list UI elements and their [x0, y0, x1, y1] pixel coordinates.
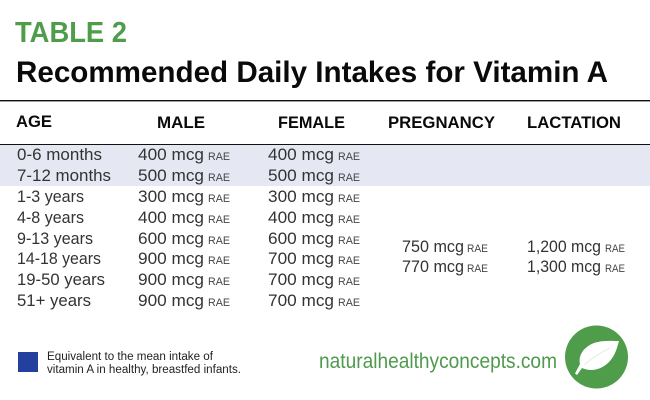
heading: title: Recommended Daily Intakes for Vitamin A: [16, 56, 608, 89]
column: lactation: [527, 238, 625, 276]
column: lactation: 1,300 mcg: [527, 258, 601, 276]
column: pregnancy: RAE: [467, 263, 488, 275]
table header row: FEMALE: [278, 113, 345, 132]
column: female: RAE: [338, 172, 360, 184]
legend note: Equivalent to the mean intake of: [47, 351, 214, 363]
column: male: 400 mcg: [138, 209, 204, 227]
column: age: [17, 146, 111, 310]
column: male: 400 mcg: [138, 146, 204, 164]
column: female: 400 mcg: [268, 146, 334, 164]
column: male: RAE: [208, 214, 230, 226]
column: pregnancy: 750 mcg: [402, 238, 464, 256]
column: age: 14-18 years: [17, 250, 101, 268]
column: pregnancy: [402, 238, 488, 276]
column: female: 600 mcg: [268, 230, 334, 248]
icon: leaf logo: [565, 326, 628, 388]
column: female: RAE: [338, 151, 360, 163]
column: male: 900 mcg: [138, 292, 204, 310]
column: female: RAE: [338, 255, 360, 267]
column: female: RAE: [338, 297, 360, 309]
highlighted infant band: [0, 145, 650, 186]
column: female: 700 mcg: [268, 250, 334, 268]
column: pregnancy: 770 mcg: [402, 258, 464, 276]
column: female: RAE: [338, 193, 360, 205]
column: female: 400 mcg: [268, 209, 334, 227]
table header row: PREGNANCY: [388, 113, 496, 132]
table header row: MALE: [157, 113, 205, 132]
column: male: RAE: [208, 235, 230, 247]
column: female: 700 mcg: [268, 292, 334, 310]
column: lactation: RAE: [605, 263, 625, 275]
column: age: 9-13 years: [17, 230, 93, 248]
column: male: RAE: [208, 255, 230, 267]
column: age: 19-50 years: [17, 271, 105, 289]
column: age: 51+ years: [17, 292, 91, 310]
table header row: [16, 112, 621, 132]
column: age: 1-3 years: [17, 188, 84, 206]
column: male: RAE: [208, 297, 230, 309]
table header row: AGE: [16, 112, 52, 131]
column: lactation: RAE: [605, 243, 625, 255]
column: male: 900 mcg: [138, 250, 204, 268]
column: pregnancy: RAE: [467, 243, 488, 255]
legend swatch: [18, 352, 38, 372]
column: female: [268, 146, 360, 310]
column: age: 0-6 months: [17, 146, 102, 164]
legend note: vitamin A in healthy, breastfed infants.: [47, 364, 241, 376]
column: male: 500 mcg: [138, 167, 204, 185]
column: female: RAE: [338, 214, 360, 226]
legend note: [47, 351, 241, 376]
table header row: LACTATION: [527, 113, 621, 132]
column: male: 900 mcg: [138, 271, 204, 289]
column: female: 700 mcg: [268, 271, 334, 289]
column: female: RAE: [338, 235, 360, 247]
column: age: 4-8 years: [17, 209, 84, 227]
column: lactation: 1,200 mcg: [527, 238, 601, 256]
heading: table number: TABLE 2: [15, 17, 127, 49]
column: male: RAE: [208, 276, 230, 288]
website name: naturalhealthyconcepts.com: [319, 350, 557, 373]
column: age: 7-12 months: [17, 167, 111, 185]
column: male: RAE: [208, 193, 230, 205]
column: male: [138, 146, 230, 310]
column: female: 300 mcg: [268, 188, 334, 206]
column: female: 500 mcg: [268, 167, 334, 185]
column: male: 600 mcg: [138, 230, 204, 248]
column: male: RAE: [208, 151, 230, 163]
column: female: RAE: [338, 276, 360, 288]
column: male: RAE: [208, 172, 230, 184]
column: male: 300 mcg: [138, 188, 204, 206]
